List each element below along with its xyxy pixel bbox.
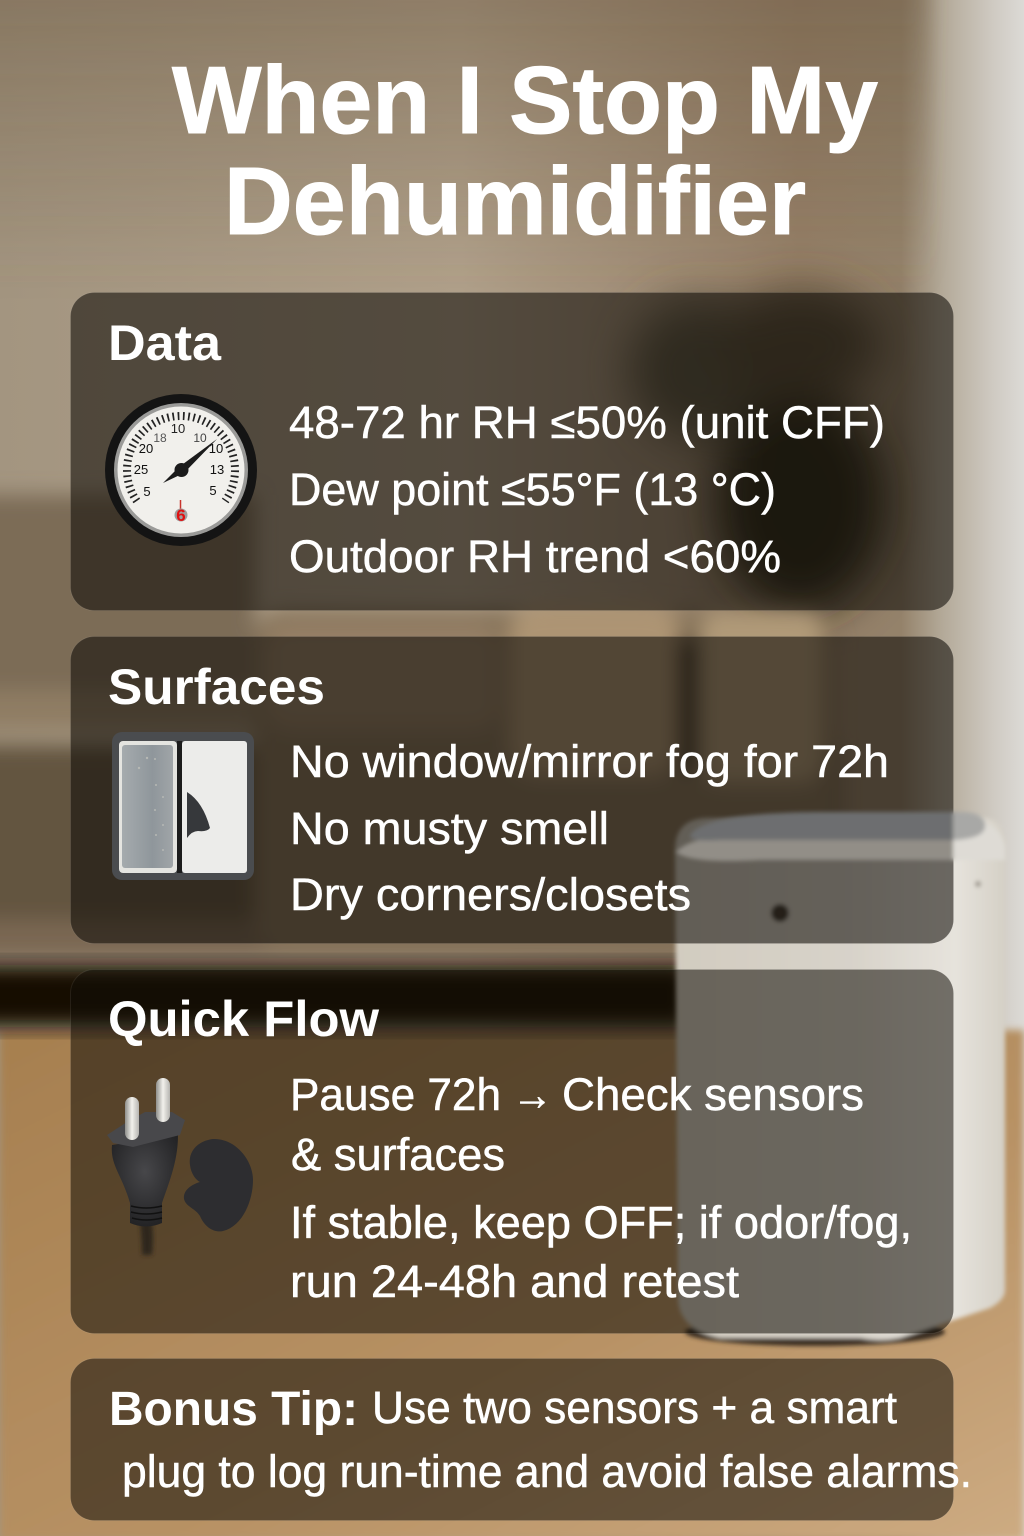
surfaces lines: No musty smell [290,803,609,854]
quick flow lines: & surfaces [291,1129,505,1180]
quick flow lines: If stable, keep OFF; if odor/fog, [290,1197,912,1248]
panel: quick flow [70,970,954,1334]
quick flow lines: Check sensors [562,1069,864,1120]
icon: plug [107,1078,253,1255]
panel: data [70,292,954,610]
surfaces lines [290,736,889,920]
data lines: Outdoor RH trend <60% [289,531,781,582]
background: dehumidifier [675,818,1005,1346]
quick flow lines [290,1069,912,1307]
title [172,47,878,255]
icon: fogged window [112,732,254,880]
icon: humidity gauge [105,394,257,546]
panel: surfaces [70,636,954,944]
bonus tip text: Bonus Tip: [109,1383,358,1436]
icon: humidity gauge: 10 [171,421,185,436]
data lines: Dew point ≤55°F (13 °C) [289,464,776,515]
dehumidifier top rim [676,812,1005,861]
quick flow lines: run 24-48h and retest [290,1256,740,1307]
icon: humidity gauge: 6 [176,506,186,525]
bonus tip text: plug to log run-time and avoid false alarms. [122,1446,972,1497]
data lines: 48-72 hr RH ≤50% (unit CFF) [289,397,885,448]
surfaces lines: Dry corners/closets [290,869,691,920]
bonus tip text: Use two sensors + a smart [372,1382,897,1433]
bonus tip text [109,1382,972,1497]
quick flow lines: Pause 72h [290,1069,501,1120]
data lines [289,397,885,582]
icon: humidity gauge: 18 [153,431,167,445]
icon: humidity gauge: 10 [193,431,207,445]
icon: rubber piece [184,1139,253,1231]
heading: surfaces: Surfaces [108,659,325,715]
quick flow lines: → [512,1069,553,1120]
heading: quick flow: Quick Flow [108,991,379,1047]
icon: humidity gauge: 25 [134,462,148,477]
icon: humidity gauge: 5 [143,484,151,499]
panel: bonus tip [70,1358,972,1520]
title: When I Stop My [172,47,878,154]
surfaces lines: No window/mirror fog for 72h [290,736,889,787]
icon: humidity gauge: 10 [209,441,223,456]
icon: humidity gauge: 13 [210,462,224,477]
icon: humidity gauge: 20 [139,441,153,456]
heading: data: Data [108,315,222,371]
title: Dehumidifier [224,148,806,255]
icon: humidity gauge: 5 [209,483,217,498]
